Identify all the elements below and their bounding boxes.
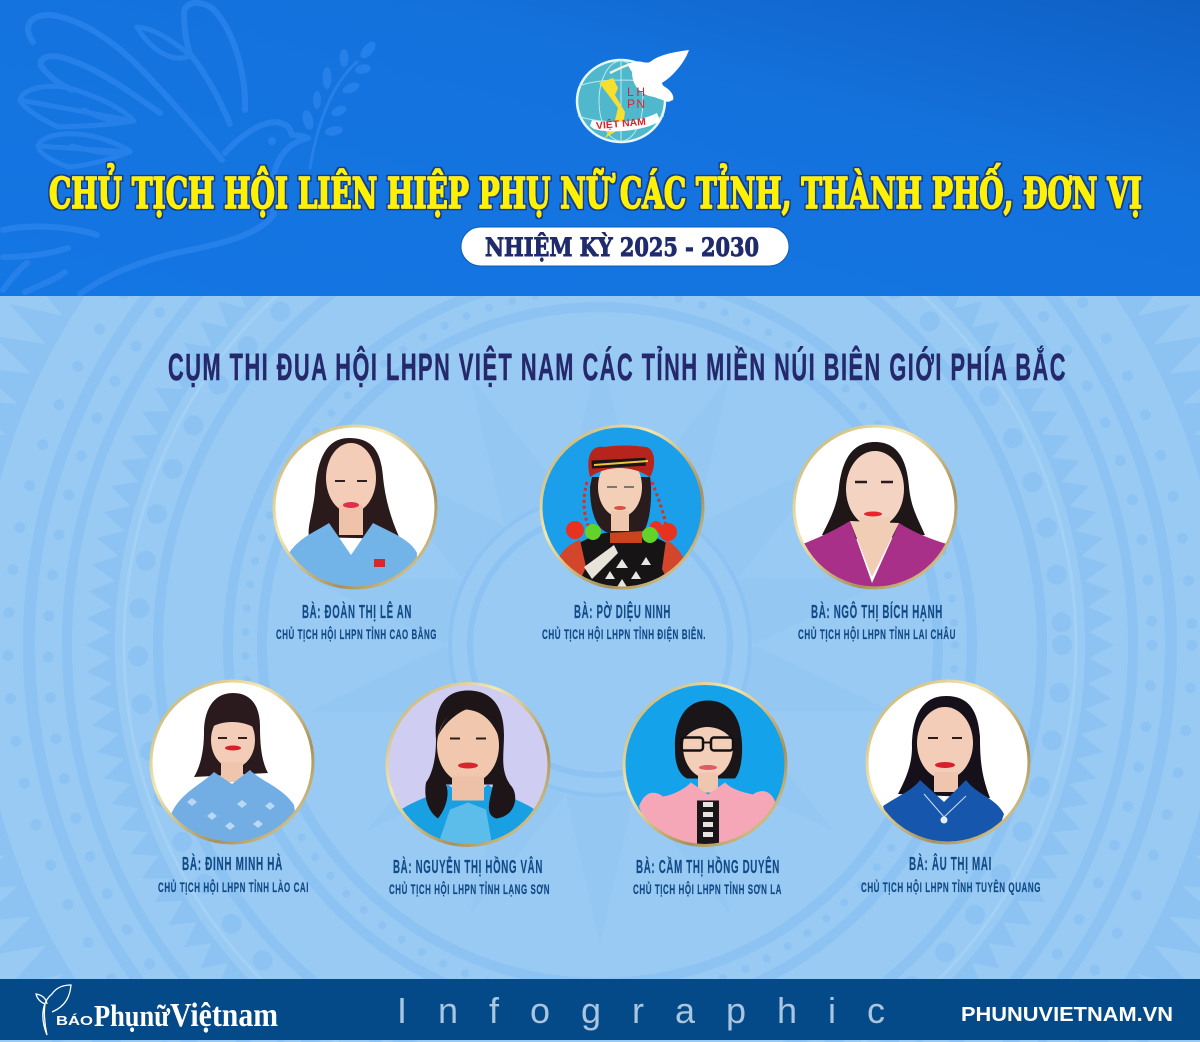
name: BÀ: NGÔ THỊ BÍCH HẠNH [811, 601, 943, 622]
footer band [0, 979, 1200, 1040]
name: BÀ: ĐOÀN THỊ LÊ AN [302, 601, 412, 622]
footer logo [36, 985, 278, 1035]
term pill: NHIỆM KỲ 2025 - 2030 [485, 233, 759, 262]
role: CHỦ TỊCH HỘI LHPN TỈNH LÀO CAI [158, 878, 309, 895]
name: BÀ: ĐINH MINH HÀ [182, 853, 283, 874]
logo ribbon [590, 113, 660, 131]
logo dove [627, 50, 689, 102]
watermark dove [3, 3, 378, 294]
name: BÀ: ÂU THỊ MAI [909, 853, 992, 874]
role: CHỦ TỊCH HỘI LHPN TỈNH ĐIỆN BIÊN. [542, 625, 706, 642]
profile: Đoàn Thị Lê An [273, 425, 437, 642]
footer logo: Việtnam [170, 997, 278, 1034]
name: BÀ: PỜ DIỆU NINH [574, 601, 671, 622]
role: CHỦ TỊCH HỘI LHPN TỈNH LẠNG SƠN [389, 880, 550, 897]
name: BÀ: NGUYỄN THỊ HỒNG VÂN [393, 856, 543, 877]
role: CHỦ TỊCH HỘI LHPN TỈNH LAI CHÂU [798, 625, 956, 642]
footer logo: Phụnữ [94, 998, 170, 1033]
profile: Âu Thị Mai [861, 680, 1041, 895]
role: CHỦ TỊCH HỘI LHPN TỈNH TUYÊN QUANG [861, 878, 1041, 895]
portrait [866, 680, 1030, 844]
portrait [150, 680, 314, 844]
portrait [273, 425, 437, 589]
portrait [793, 425, 957, 589]
header band [0, 0, 1200, 296]
profile: Đinh Minh Hà [150, 680, 314, 895]
portrait [386, 682, 550, 846]
portrait [540, 425, 704, 589]
logo: Hội LHPN Việt Nam: PN [627, 97, 645, 111]
name: BÀ: CẦM THỊ HỒNG DUYÊN [636, 856, 780, 877]
logo map [599, 78, 625, 138]
profile: Nguyễn Thị Hồng Vân [386, 682, 550, 897]
role: CHỦ TỊCH HỘI LHPN TỈNH CAO BẰNG [276, 625, 437, 642]
portrait [623, 682, 787, 846]
background pattern [0, 296, 1200, 1042]
term pill [461, 227, 789, 266]
logo: Hội LHPN Việt Nam [577, 50, 689, 142]
footer label: Infographic [397, 990, 885, 1031]
footer logo: BÁO [56, 1013, 93, 1028]
logo: Hội LHPN Việt Nam: VIỆT NAM [595, 115, 646, 132]
profile: Ngô Thị Bích Hạnh [793, 425, 957, 642]
role: CHỦ TỊCH HỘI LHPN TỈNH SƠN LA [633, 880, 782, 897]
profile: Cầm Thị Hồng Duyên [623, 682, 787, 897]
profile: Pờ Diệu Ninh [540, 425, 706, 642]
logo letters: LH [627, 85, 645, 99]
website: PHUNUVIETNAM.VN [961, 1004, 1173, 1026]
